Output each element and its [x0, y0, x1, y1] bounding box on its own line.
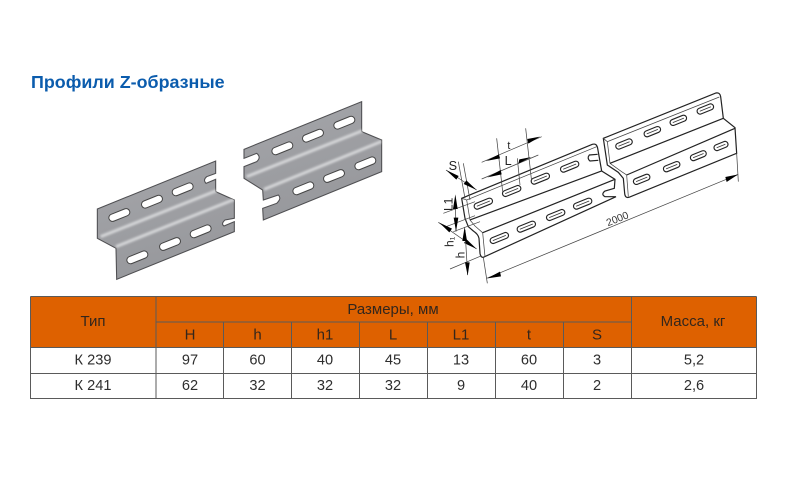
row: K 241: 2,6	[684, 378, 704, 394]
dimension: S: S	[449, 159, 457, 173]
row: K 241	[75, 378, 704, 394]
row: K 241: 32	[385, 378, 401, 394]
row: K 239: 60	[249, 352, 266, 368]
header labels: L	[389, 326, 397, 344]
header labels: H	[185, 326, 195, 344]
row: K 239	[75, 352, 704, 368]
row: K 239: 45	[385, 352, 401, 368]
row: K 241: 32	[317, 378, 333, 394]
dimension: h1	[438, 222, 480, 249]
row: K 239: К 239	[75, 352, 111, 368]
row: K 241: 2	[593, 378, 601, 394]
header labels: L1	[453, 326, 469, 344]
row: K 241: 40	[521, 378, 537, 394]
drawing: left profile section	[462, 144, 616, 257]
dimension: S	[446, 159, 477, 200]
dimension: 2000: 2000	[605, 210, 631, 229]
drawing: right profile section	[603, 93, 737, 197]
dimension: L1: L1	[441, 197, 455, 211]
row: K 241: 62	[182, 378, 198, 394]
table grid	[30, 296, 756, 399]
row: K 241: К 241	[75, 378, 111, 394]
row: K 239: 97	[182, 352, 198, 368]
dimension: L	[482, 154, 538, 185]
row: K 239: 13	[453, 352, 469, 368]
title: Профили Z-образные	[31, 72, 225, 92]
row: K 239: 5,2	[684, 352, 704, 368]
header labels: h1	[317, 326, 333, 344]
row: K 239: 40	[317, 352, 333, 368]
header labels: h	[253, 326, 262, 344]
dimension: L1	[441, 194, 475, 232]
dimension: t	[482, 128, 542, 192]
dimension: h	[450, 227, 482, 276]
dimension: h1: 1	[450, 236, 457, 240]
header labels: Тип	[80, 313, 106, 330]
header labels: Масса, кг	[661, 313, 726, 330]
table: dimensions and mass	[30, 296, 756, 399]
row: K 239: 3	[593, 352, 601, 368]
table header background	[30, 296, 756, 348]
illustration: left Z-profile photo	[97, 161, 234, 279]
dimension: 2000	[483, 153, 738, 283]
dimension: h: h	[454, 252, 468, 258]
illustration: right Z-profile photo	[244, 102, 382, 220]
dimension: L: L	[505, 154, 512, 168]
row: K 241: 32	[249, 378, 266, 394]
row: K 239: 60	[521, 352, 537, 368]
dimension: h1: h	[442, 240, 456, 247]
technical drawing with dimensions	[438, 93, 738, 283]
header labels: Размеры, мм	[347, 301, 439, 318]
header labels: S	[592, 326, 602, 344]
header labels	[80, 301, 726, 344]
header labels: t	[527, 326, 532, 344]
dimension: t: t	[507, 140, 510, 152]
row: K 241: 9	[457, 378, 465, 394]
